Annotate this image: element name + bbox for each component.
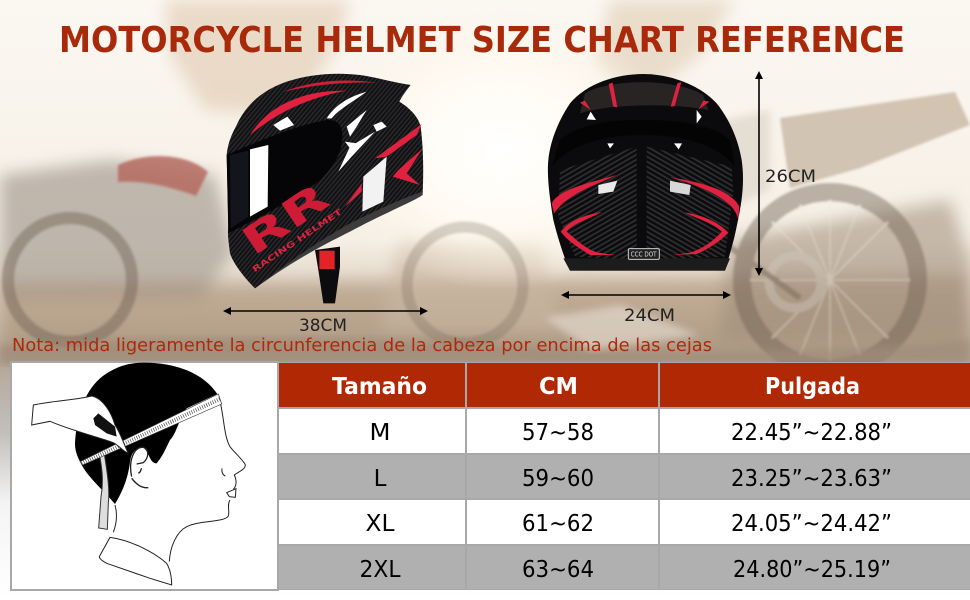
row 2XL: 2XL xyxy=(360,557,401,583)
fingers shadow xyxy=(93,413,117,437)
row XL xyxy=(279,500,970,544)
racing helmet text: RACING HELMET xyxy=(251,207,344,274)
row XL: 24.05”~24.42” xyxy=(731,511,892,537)
table header row: CM xyxy=(539,374,578,400)
row XL: XL xyxy=(366,511,395,537)
table header row xyxy=(279,363,970,407)
ear xyxy=(131,447,148,488)
note text: Nota: mida ligeramente la circunferencia de la cabeza por encima de las cejas xyxy=(12,335,712,356)
row M: 57~58 xyxy=(522,420,594,446)
panel: head measuring illustration xyxy=(11,362,278,590)
panel: size table xyxy=(278,362,970,590)
row M: 22.45”~22.88” xyxy=(731,420,892,446)
label: 26CM: 26CM xyxy=(765,167,816,187)
row 2XL: 24.80”~25.19” xyxy=(733,557,891,583)
row L: 23.25”~23.63” xyxy=(731,466,892,492)
hanging tape xyxy=(99,452,109,529)
label: 24CM: 24CM xyxy=(624,306,675,326)
row L: 59~60 xyxy=(522,466,594,492)
tape around head xyxy=(80,394,222,465)
row XL: 61~62 xyxy=(522,511,594,537)
row M xyxy=(279,409,970,453)
helmet rear view xyxy=(548,74,743,271)
face and neck line xyxy=(113,402,245,562)
hand xyxy=(32,396,128,453)
RR logo text: RR xyxy=(234,175,337,265)
left bike red fender xyxy=(118,156,208,196)
row 2XL xyxy=(279,546,970,589)
arrow: 38CM width xyxy=(223,307,428,315)
row 2XL: 63~64 xyxy=(522,557,594,583)
collar xyxy=(99,537,172,585)
label: 38CM: 38CM xyxy=(299,316,347,336)
table header row: Pulgada xyxy=(765,374,860,400)
hair silhouette xyxy=(75,363,217,504)
row L xyxy=(279,455,970,498)
row M: M xyxy=(370,420,390,446)
mouth and nose xyxy=(222,468,236,497)
table header row: Tamaño xyxy=(332,374,427,400)
row L: L xyxy=(374,466,387,492)
ccc dot badge xyxy=(628,249,659,259)
arrow: 26CM height xyxy=(755,71,763,276)
ccc dot badge: CCC DOT xyxy=(631,250,657,259)
arrow: 24CM width xyxy=(561,291,731,299)
helmet side view xyxy=(227,74,423,303)
